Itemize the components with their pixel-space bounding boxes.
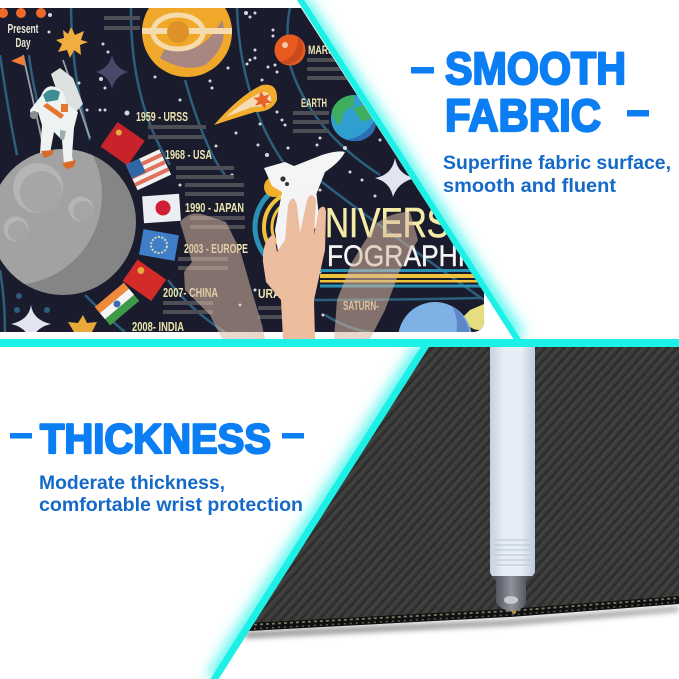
heading: thickness: THICKNESS [40, 415, 271, 462]
text: smooth fabric description: Superfine fabric surface, [443, 153, 671, 174]
icon: moon [0, 149, 136, 295]
labels: planets: MARS [308, 43, 334, 57]
hand on mouse [263, 195, 326, 339]
icon: computer mouse [275, 188, 320, 252]
white fill beyond diagonal and glow: top [298, 0, 517, 339]
cyan diagonal divider: lower [212, 342, 428, 679]
heading: smooth fabric: FABRIC [445, 90, 601, 141]
icon: astronaut [30, 60, 90, 169]
label: present day: Present [8, 21, 39, 36]
flag: USA [126, 149, 171, 190]
flag: USSR [100, 122, 145, 165]
flag: China [123, 260, 166, 301]
orbit lines [0, 8, 484, 332]
flag: India [95, 283, 139, 325]
pen brass point [512, 610, 516, 614]
text: smooth fabric description [443, 153, 671, 197]
labels: space mission years: 1968 - USA [165, 147, 212, 162]
label: present day [8, 24, 38, 50]
icon: present day dots [0, 8, 46, 18]
pen pressing on fabric [490, 347, 535, 614]
labels: space mission years: 1990 - JAPAN [185, 200, 244, 215]
panel: smooth fabric mat illustration [0, 8, 484, 332]
text: thickness description: comfortable wrist protection [39, 495, 303, 516]
labels: space mission years [132, 109, 248, 334]
text: thickness description: Moderate thickness, [39, 473, 225, 494]
translucent ghost hands [180, 212, 418, 339]
flag: Japan [142, 194, 181, 223]
cyan horizontal divider [0, 339, 679, 347]
icon: logo rings [252, 194, 282, 257]
flag: EU [139, 229, 179, 261]
star field [48, 11, 382, 316]
labels: space mission years: 2008- INDIA [132, 319, 184, 334]
grey placeholder text bars [104, 16, 347, 319]
icon: orange star [56, 27, 88, 58]
icon: space shuttle [264, 151, 345, 197]
decorative bars under heading [320, 269, 485, 288]
labels: space mission years: 2003 - EUROPE [184, 241, 248, 256]
stitched edge [248, 598, 679, 629]
labels: planets: EARTH [301, 96, 327, 110]
heading on mat: universe infographic: NIVERS [325, 199, 449, 246]
label: present day: Day [16, 35, 31, 50]
icon: flag on pole [11, 55, 43, 145]
labels: planets: URAN [258, 286, 288, 301]
icon: yellow planet [142, 8, 232, 77]
labels: space mission years: 2007- CHINA [163, 285, 218, 300]
ghost hand: right [334, 212, 418, 339]
labels: planets [258, 43, 379, 313]
icon: white star [375, 158, 415, 197]
icons: small bottom stars [11, 293, 97, 332]
icon: mars [274, 34, 306, 66]
icon: earth [331, 95, 377, 141]
text: thickness description [39, 473, 303, 516]
heading: smooth fabric [411, 43, 649, 141]
panel: thickness fabric photo [244, 347, 679, 642]
cyan diagonal divider: top [298, 0, 519, 342]
pen tip [491, 576, 532, 612]
ghost hand: left [180, 214, 265, 339]
heading on mat: universe infographic [328, 208, 463, 266]
pen body [490, 347, 535, 578]
heading: smooth fabric: SMOOTH [445, 43, 626, 94]
fabric surface [250, 347, 679, 631]
icon: navy star [96, 55, 128, 89]
icon: blue planet and ring [398, 302, 484, 332]
glow: lower diagonal [215, 347, 425, 679]
icon: comet [214, 85, 277, 125]
labels: space mission years: 1959 - URSS [136, 109, 188, 124]
pen thread rings [495, 540, 530, 565]
fabric drop shadow [245, 607, 679, 638]
icon: engine glow behind shuttle [264, 178, 282, 197]
heading on mat: universe infographic: FOGRAPHI [327, 240, 465, 273]
text: smooth fabric description: smooth and fluent [443, 176, 617, 197]
flags [95, 122, 181, 325]
labels: planets: SATURN- [343, 298, 379, 313]
